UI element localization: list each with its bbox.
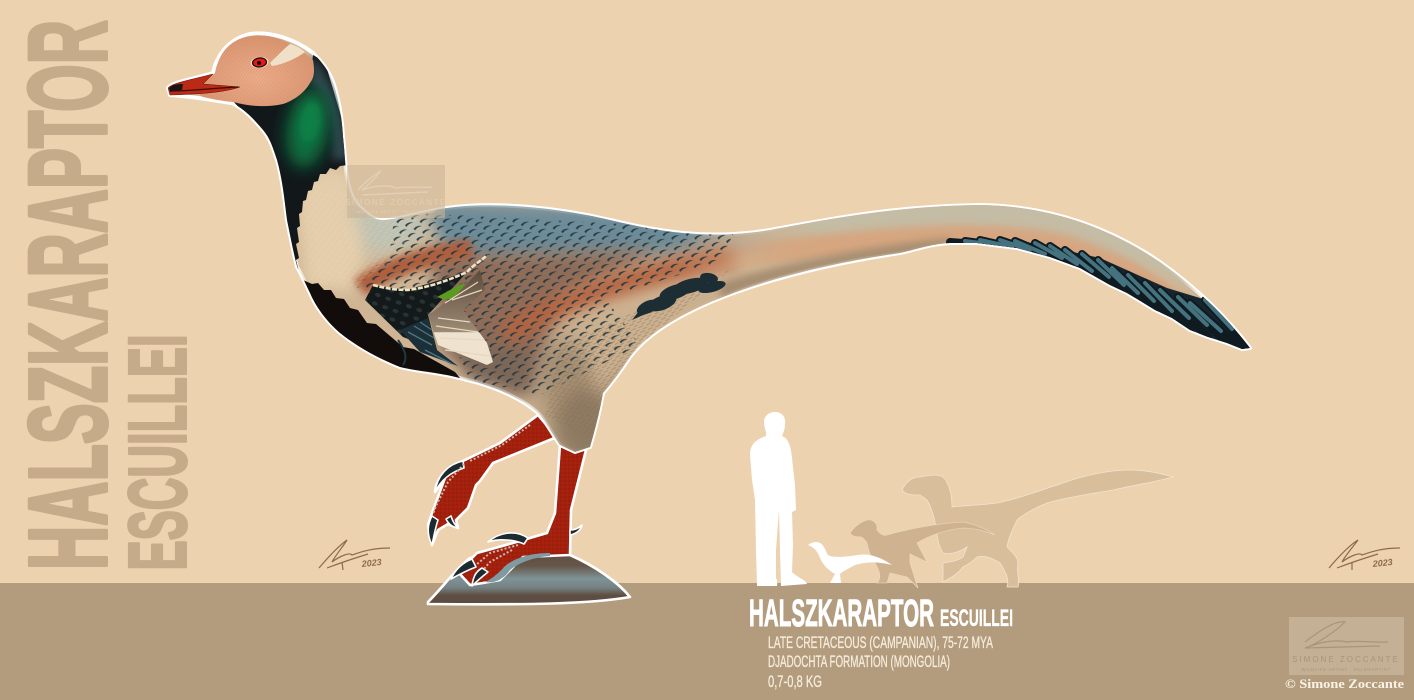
neck back blue-grey xyxy=(310,58,348,160)
tail mid peach xyxy=(682,205,1178,291)
chest cream xyxy=(296,165,367,293)
neck green core xyxy=(298,102,323,140)
size comparison: medium dromaeosaur silhouette xyxy=(850,520,995,588)
standing leg and foot xyxy=(451,445,586,586)
species name: HALSZKARAPTOR xyxy=(749,593,934,635)
raised foot claws xyxy=(428,461,464,545)
species facts: 0,7-0,8 KG xyxy=(768,673,822,691)
watermark on neck: WILDLIFE ARTIST · PALEOARTIST xyxy=(357,209,435,214)
thigh dark feather patch xyxy=(632,272,727,320)
wing green speculum xyxy=(437,282,465,300)
species facts xyxy=(768,634,993,691)
watermark bottom right: SIMONE ZOCCANTE xyxy=(1292,655,1400,664)
raised leg xyxy=(428,415,557,545)
watermark on neck: SIMONE ZOCCANTE xyxy=(345,198,447,207)
lower body shading xyxy=(520,340,640,460)
head xyxy=(168,35,314,106)
folded wing xyxy=(365,255,493,366)
ground band xyxy=(0,583,1414,700)
scale texture back xyxy=(355,212,735,395)
tan feather strokes xyxy=(545,270,730,445)
species facts: LATE CRETACEOUS (CAMPANIAN), 75-72 MYA xyxy=(768,634,993,652)
standing foot claws xyxy=(451,525,582,586)
tail top grey xyxy=(721,205,1202,298)
wing cream edge xyxy=(373,255,487,290)
mid-body brown xyxy=(430,250,660,395)
size comparison: human silhouette xyxy=(750,412,807,586)
size comparison: halszkaraptor silhouette xyxy=(808,542,892,583)
tail base under-shadow xyxy=(720,238,950,300)
signature left: 2023 xyxy=(360,557,382,569)
rock perch xyxy=(428,553,630,604)
tail feathers dark xyxy=(950,240,1250,349)
signature left xyxy=(319,540,390,570)
species facts: DJADOCHTA FORMATION (MONGOLIA) xyxy=(768,653,950,671)
shoulder pale band xyxy=(350,205,425,258)
raised foot toe scales xyxy=(433,425,530,514)
tan hip fade xyxy=(575,272,735,395)
pale feather strokes xyxy=(303,208,418,289)
signature right xyxy=(1329,540,1400,570)
head feather texture xyxy=(199,35,314,106)
rust band rear xyxy=(505,256,735,335)
breast black xyxy=(304,280,460,378)
back blue band xyxy=(422,205,777,262)
eye xyxy=(250,56,269,69)
tail dark base xyxy=(977,242,1250,349)
wing pale primaries xyxy=(428,270,493,365)
flank brown lower xyxy=(450,345,530,395)
copyright: © Simone Zoccante xyxy=(1285,676,1404,691)
watermark on neck xyxy=(345,165,447,218)
watermark bottom right: WILDLIFE ARTIST · PALEOARTIST xyxy=(1301,667,1391,672)
watermark bottom right xyxy=(1289,617,1404,675)
standing foot toe scales xyxy=(476,545,518,570)
tail feathers blue xyxy=(965,240,1232,331)
wing lower feathers xyxy=(400,318,458,366)
neck dark xyxy=(232,55,348,276)
head pale stripe xyxy=(270,44,305,66)
size comparison: large dromaeosaur silhouette xyxy=(902,470,1173,587)
standing foot webbing xyxy=(485,553,550,582)
beak xyxy=(168,74,240,95)
rust band front xyxy=(360,248,472,288)
signature right: 2023 xyxy=(1371,557,1393,569)
species name: ESCUILLEI xyxy=(940,605,1013,632)
vertical title: species: ESCUILLEI xyxy=(112,335,204,570)
dinosaur body xyxy=(168,33,1250,461)
neck green patch xyxy=(280,85,336,171)
